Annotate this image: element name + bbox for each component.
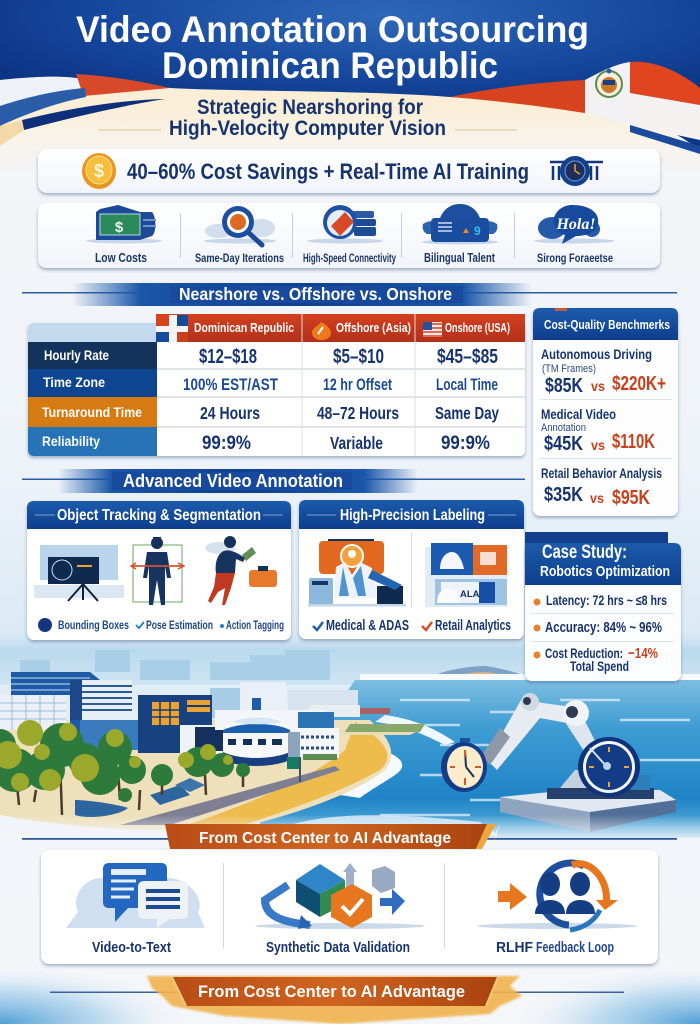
icon: clock with bars [550,156,603,186]
savings banner [38,149,660,193]
illustration: retail labeling: ALA [460,589,480,600]
row: hourly rate: $5–$10 [333,346,384,368]
table header: Dominican Republic [194,321,294,335]
row labels: Reliability [42,434,100,449]
benefit: same-day iterations [195,206,284,265]
panel: cost-quality benchmarks: Cost-Quality Benchmerks [544,317,670,332]
benchmark: retail behavior analysis: $95K [612,487,650,509]
benchmark: autonomous driving: vs [591,378,605,394]
row: turnaround time: Same Day [435,403,499,423]
benefit: same-day iterations: Same-Day Iterations [195,251,284,265]
illustration: pose estimation figure [131,537,184,605]
row: turnaround time: 48–72 Hours [317,403,399,423]
title: Video Annotation Outsourcing [76,9,589,50]
panel: object tracking and segmentation: Object Tracking & Segmentation [57,507,261,524]
benefit: bilingual talent [422,204,498,265]
benchmark: retail behavior analysis: Retail Behavior Analysis [541,465,662,481]
metric: accuracy: Accuracy: 84% ~ 96% [545,620,662,636]
benchmark: medical video annotation: $45K [544,433,583,455]
icon: stopwatch [441,738,487,792]
flag: right ribbon [450,62,700,154]
illustration: bounding boxes monitor [34,545,124,601]
benchmark: retail behavior analysis [541,465,662,509]
benchmark: autonomous driving: $85K [545,375,583,397]
icon: dominican flag [156,315,188,342]
table header [156,314,525,342]
benchmark: retail behavior analysis: vs [590,490,604,506]
comparison table [28,314,525,456]
icon: gauge [578,737,640,797]
text banner: from cost center top: From Cost Center to AI Advantage [199,830,451,847]
section heading: comparison: Nearshore vs. Offshore vs. Onshore [179,284,452,304]
icon: robot arm [482,693,676,832]
service: video-to-text: Video-to-Text [92,939,171,956]
metric: cost reduction: Total Spend [570,659,629,674]
icon: offshore badge [312,322,331,340]
icon: dollar coin: $ [94,161,104,181]
benchmark: medical video annotation: vs [591,437,605,453]
benefit: strong forecast [534,205,614,265]
title: Dominican Republic [162,45,498,86]
legend: labeling tags: Medical & ADAS [326,618,409,634]
row: hourly rate [199,346,498,368]
benchmark: medical video annotation: Annotation [541,422,586,434]
service: synthetic data validation [255,863,425,956]
panel: object tracking and segmentation [27,501,291,640]
legend: tracking tags [38,618,284,632]
benchmark: autonomous driving: (TM Frames) [542,363,596,375]
benefit: bilingual talent: Bilingual Talent [424,251,496,265]
metric: cost reduction [534,645,658,674]
benefit: high-speed connectivity [303,205,396,265]
row labels: Time Zone [43,375,105,390]
row: reliability: Variable [330,433,383,453]
service: rlhf feedback loop: RLHF [496,939,533,956]
text banner: from cost center bottom: From Cost Center to AI Advantage [198,982,465,1001]
row: turnaround time: 24 Hours [200,403,260,423]
icon: dollar coin [82,153,116,189]
benefit: strong forecast: Sirong Foraeetse [537,251,613,265]
row: time zone: 100% EST/AST [183,375,278,394]
illustration: retail labeling [425,543,507,607]
subtitle: Strategic Nearshoring for [197,96,423,119]
row labels: Hourly Rate [44,348,109,363]
service: rlhf feedback loop [477,863,637,956]
row: hourly rate: $12–$18 [199,346,257,368]
row: hourly rate: $45–$85 [437,346,498,368]
row: time zone: Local Time [436,375,498,394]
icon: coat of arms [596,68,622,97]
benchmark: autonomous driving: $220K+ [612,373,666,395]
savings banner: 40–60% Cost Savings + Real-Time AI Training [127,159,529,184]
legend: tracking tags: Bounding Boxes [58,618,129,632]
service: rlhf feedback loop: Feedback Loop [536,940,614,956]
section heading: comparison [22,283,677,306]
table header: Onshore (USA) [445,321,510,335]
sky and far skyline [0,630,700,685]
legend: tracking tags: Pose Estimation [146,618,213,632]
row labels [28,342,157,456]
metric: latency: Latency: 72 hrs ~ ≤8 hrs [546,593,667,608]
text banner: from cost center bottom [50,976,624,1024]
panel: case study [525,532,681,681]
benefits row [38,203,660,268]
illustration: coastal city and robot scene [0,630,700,843]
benchmark: medical video annotation: $110K [612,431,655,453]
panel: cost-quality benchmarks [533,308,678,516]
header banner [0,0,700,154]
panel: case study: Case Study: [542,542,627,563]
subtitle [98,96,517,140]
metric: cost reduction: Cost Reduction: [545,646,623,661]
trees [0,720,250,815]
illustration: action tagging figure [205,536,277,605]
panel: ai advantage services [41,850,658,964]
legend: tracking tags: Action Tagging [226,618,284,632]
panel: high-precision labeling: High-Precision Labeling [340,507,485,524]
panel: high-precision labeling [299,500,524,639]
benchmark: medical video annotation: Medical Video [541,406,616,422]
row: time zone: 12 hr Offset [323,375,392,394]
sea [250,680,700,838]
row: reliability: 99:9% [202,433,251,454]
service: synthetic data validation: Synthetic Data Validation [266,939,410,956]
buildings [0,672,390,782]
flag: left ribbon [0,74,170,146]
benchmark: medical video annotation [541,406,655,455]
section heading: advanced video annotation [22,469,525,493]
benefit: strong forecast: Hola! [555,216,596,233]
row: reliability [202,433,490,454]
legend: labeling tags [313,618,511,634]
illustration: medical labeling [308,539,406,606]
row: reliability: 99:9% [441,433,490,454]
section heading: advanced video annotation: Advanced Video Annotation [123,471,343,491]
benefit: low costs [86,205,162,265]
land and beach [0,720,425,832]
service: video-to-text [66,863,205,956]
benefit: low costs: Low Costs [95,251,147,265]
row: time zone [183,375,498,394]
panel: case study: Robotics Optimization [540,563,670,580]
row labels: Turnaround Time [42,405,142,420]
row: turnaround time [200,403,499,423]
bottom decorative corners [0,964,700,1024]
table header: Offshore (Asia) [336,321,411,335]
title [76,9,589,86]
scene bottom fade [0,815,700,843]
benefit: bilingual talent: 9 [474,224,481,238]
benefit: low costs: $ [115,219,124,236]
benchmark: retail behavior analysis: $35K [544,484,583,506]
benchmark: autonomous driving: Autonomous Driving [541,346,652,362]
text banner: from cost center top [22,824,677,849]
legend: labeling tags: Retail Analytics [435,618,511,634]
subtitle: High-Velocity Computer Vision [169,117,446,140]
icon: us flag [423,322,442,337]
metric: cost reduction: −14% [628,645,658,662]
benefit: high-speed connectivity: High-Speed Connectivity [303,253,396,265]
benchmark: autonomous driving [541,346,666,397]
